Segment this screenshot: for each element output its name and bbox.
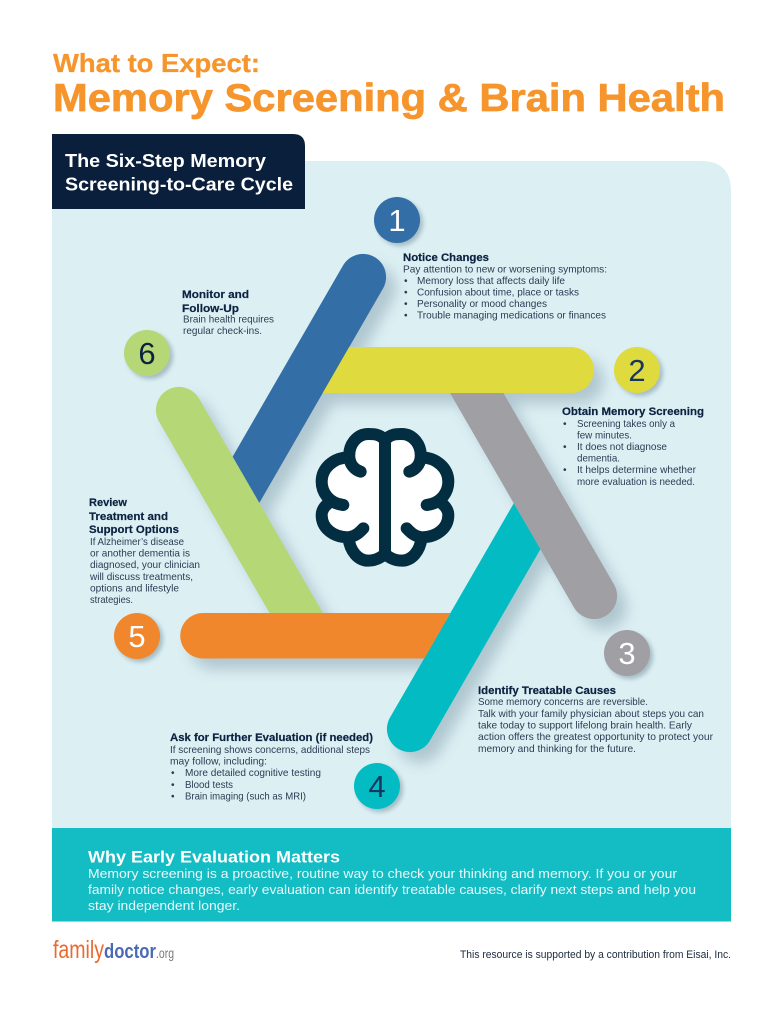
step 2 number: 2 [628, 353, 646, 388]
cycle bar: green [156, 387, 323, 613]
step 4 text: further evaluation: Brain imaging (such as MRI) [185, 792, 306, 803]
cycle bar: yellow [323, 347, 594, 393]
footer: sponsor note: This resource is supported by a contribution from Eisai, Inc. [460, 949, 731, 961]
step 3 text: identify treatable causes: take today to support lifelong brain health. Early [478, 721, 693, 732]
step 5 text: treatment and support options: Treatment and [89, 511, 168, 523]
cycle bar: blue [233, 254, 386, 503]
step 5 number [114, 613, 163, 662]
heading: six-step cycle [52, 134, 305, 209]
step 4 text: further evaluation [170, 732, 373, 803]
step 2 text: obtain memory screening: more evaluation is needed. [577, 477, 695, 488]
step 4 number: 4 [368, 769, 386, 804]
step 4 text: further evaluation: • [171, 792, 175, 803]
step 4 text: further evaluation: Blood tests [185, 780, 233, 791]
step 2 text: obtain memory screening: • [563, 419, 567, 430]
step 3 text: identify treatable causes: Some memory concerns are reversible. [478, 697, 648, 708]
step 2 text: obtain memory screening: few minutes. [577, 430, 632, 442]
panel: why early evaluation matters: family notice changes, early evaluation can identify treatable causes, clarify next steps and help you [88, 882, 696, 897]
step 2 text: obtain memory screening: dementia. [577, 454, 620, 465]
panel: why early evaluation matters: Memory screening is a proactive, routine way to check your thinking and memory. If you or your [88, 866, 678, 881]
step 4 text: further evaluation: If screening shows concerns, additional steps [170, 745, 370, 756]
step 5 text: treatment and support options: will discuss treatments, [89, 572, 193, 583]
step 4 text: further evaluation: • [171, 780, 175, 791]
step 6 number: 6 [138, 336, 156, 371]
step 1 text: notice changes: • [404, 288, 408, 298]
bar shadows [166, 265, 627, 763]
step 5 text: treatment and support options: Review [89, 497, 128, 509]
logo: familydoctor.org [53, 936, 174, 964]
step 2 text: obtain memory screening: It helps determine whether [577, 465, 697, 476]
step 3 text: identify treatable causes: Talk with your family physician about steps you can [478, 709, 704, 720]
step 1 text: notice changes [403, 252, 607, 322]
step 5 text: treatment and support options: diagnosed, your clinician [90, 560, 200, 571]
step 1 text: notice changes: • [404, 299, 408, 310]
title: What to Expect: [53, 48, 260, 78]
step 5 text: treatment and support options [89, 497, 200, 606]
step 6 text: monitor and follow-up: Follow-Up [182, 303, 239, 315]
step 4 text: further evaluation: Ask for Further Evaluation (if needed) [170, 732, 373, 744]
step 1 number: 1 [388, 203, 406, 238]
step 6 text: monitor and follow-up [182, 289, 274, 337]
step 4 text: further evaluation: • [171, 768, 175, 779]
step 4 text: further evaluation: More detailed cognitive testing [185, 768, 321, 779]
step 4 text: further evaluation: may follow, including: [170, 757, 267, 768]
step 1 text: notice changes: Trouble managing medications or finances [417, 311, 606, 322]
cycle bar: teal [387, 503, 540, 752]
title [53, 48, 725, 120]
panel: why early evaluation matters [52, 828, 731, 922]
step 1 text: notice changes: Pay attention to new or worsening symptoms: [403, 264, 607, 275]
step 3 text: identify treatable causes [478, 685, 714, 755]
step 5 text: treatment and support options: options and lifestyle [90, 584, 179, 595]
logo: familydoctor.org: .org [156, 945, 174, 961]
cycle bar: gray [450, 393, 617, 619]
step 6 number [124, 330, 173, 379]
step 5 text: treatment and support options: or another dementia is [90, 549, 190, 560]
step 2 text: obtain memory screening: • [563, 442, 567, 453]
step 5 text: treatment and support options: If Alzheimer’s disease [90, 537, 184, 548]
step 2 text: obtain memory screening: It does not diagnose [577, 442, 667, 453]
logo: familydoctor.org: family [53, 936, 104, 964]
step 6 text: monitor and follow-up: Brain health requires [183, 315, 274, 326]
step 3 text: identify treatable causes: memory and thinking for the future. [478, 744, 636, 755]
title: Memory Screening & Brain Health [53, 77, 725, 120]
step 3 text: identify treatable causes: action offers the greatest opportunity to protect your [478, 732, 714, 743]
heading: six-step cycle: Screening-to-Care Cycle [65, 174, 293, 194]
step 5 number: 5 [128, 619, 146, 654]
step 1 text: notice changes: Confusion about time, place or tasks [417, 288, 579, 298]
step 2 text: obtain memory screening: Screening takes only a [577, 419, 675, 430]
step 4 number [354, 763, 403, 812]
step 2 text: obtain memory screening: Obtain Memory Screening [562, 406, 704, 418]
cycle bar: orange [180, 613, 450, 658]
step 1 text: notice changes: • [404, 276, 408, 287]
step 5 text: treatment and support options: strategies. [90, 595, 133, 606]
step 2 text: obtain memory screening [562, 406, 704, 488]
step 6 text: monitor and follow-up: Monitor and [182, 289, 249, 301]
step 1 text: notice changes: Memory loss that affects daily life [417, 276, 565, 287]
step 5 text: treatment and support options: Support Options [89, 524, 179, 536]
heading: six-step cycle: The Six-Step Memory [65, 150, 267, 171]
step 3 number [604, 630, 653, 679]
step 1 text: notice changes: • [404, 311, 408, 322]
logo: familydoctor.org: doctor [104, 941, 156, 963]
panel: cycle background [52, 161, 731, 828]
panel: why early evaluation matters: Why Early Evaluation Matters [88, 848, 340, 866]
icon: brain [322, 434, 448, 561]
step 1 text: notice changes: Personality or mood changes [417, 299, 547, 310]
step 1 number [374, 197, 423, 246]
step 2 number [614, 347, 663, 396]
panel: why early evaluation matters: stay independent longer. [88, 898, 240, 913]
step 3 text: identify treatable causes: Identify Treatable Causes [478, 685, 616, 697]
step 6 text: monitor and follow-up: regular check-ins. [183, 326, 262, 337]
step 2 text: obtain memory screening: • [563, 465, 567, 476]
step 3 number: 3 [618, 636, 636, 671]
step 1 text: notice changes: Notice Changes [403, 252, 489, 264]
